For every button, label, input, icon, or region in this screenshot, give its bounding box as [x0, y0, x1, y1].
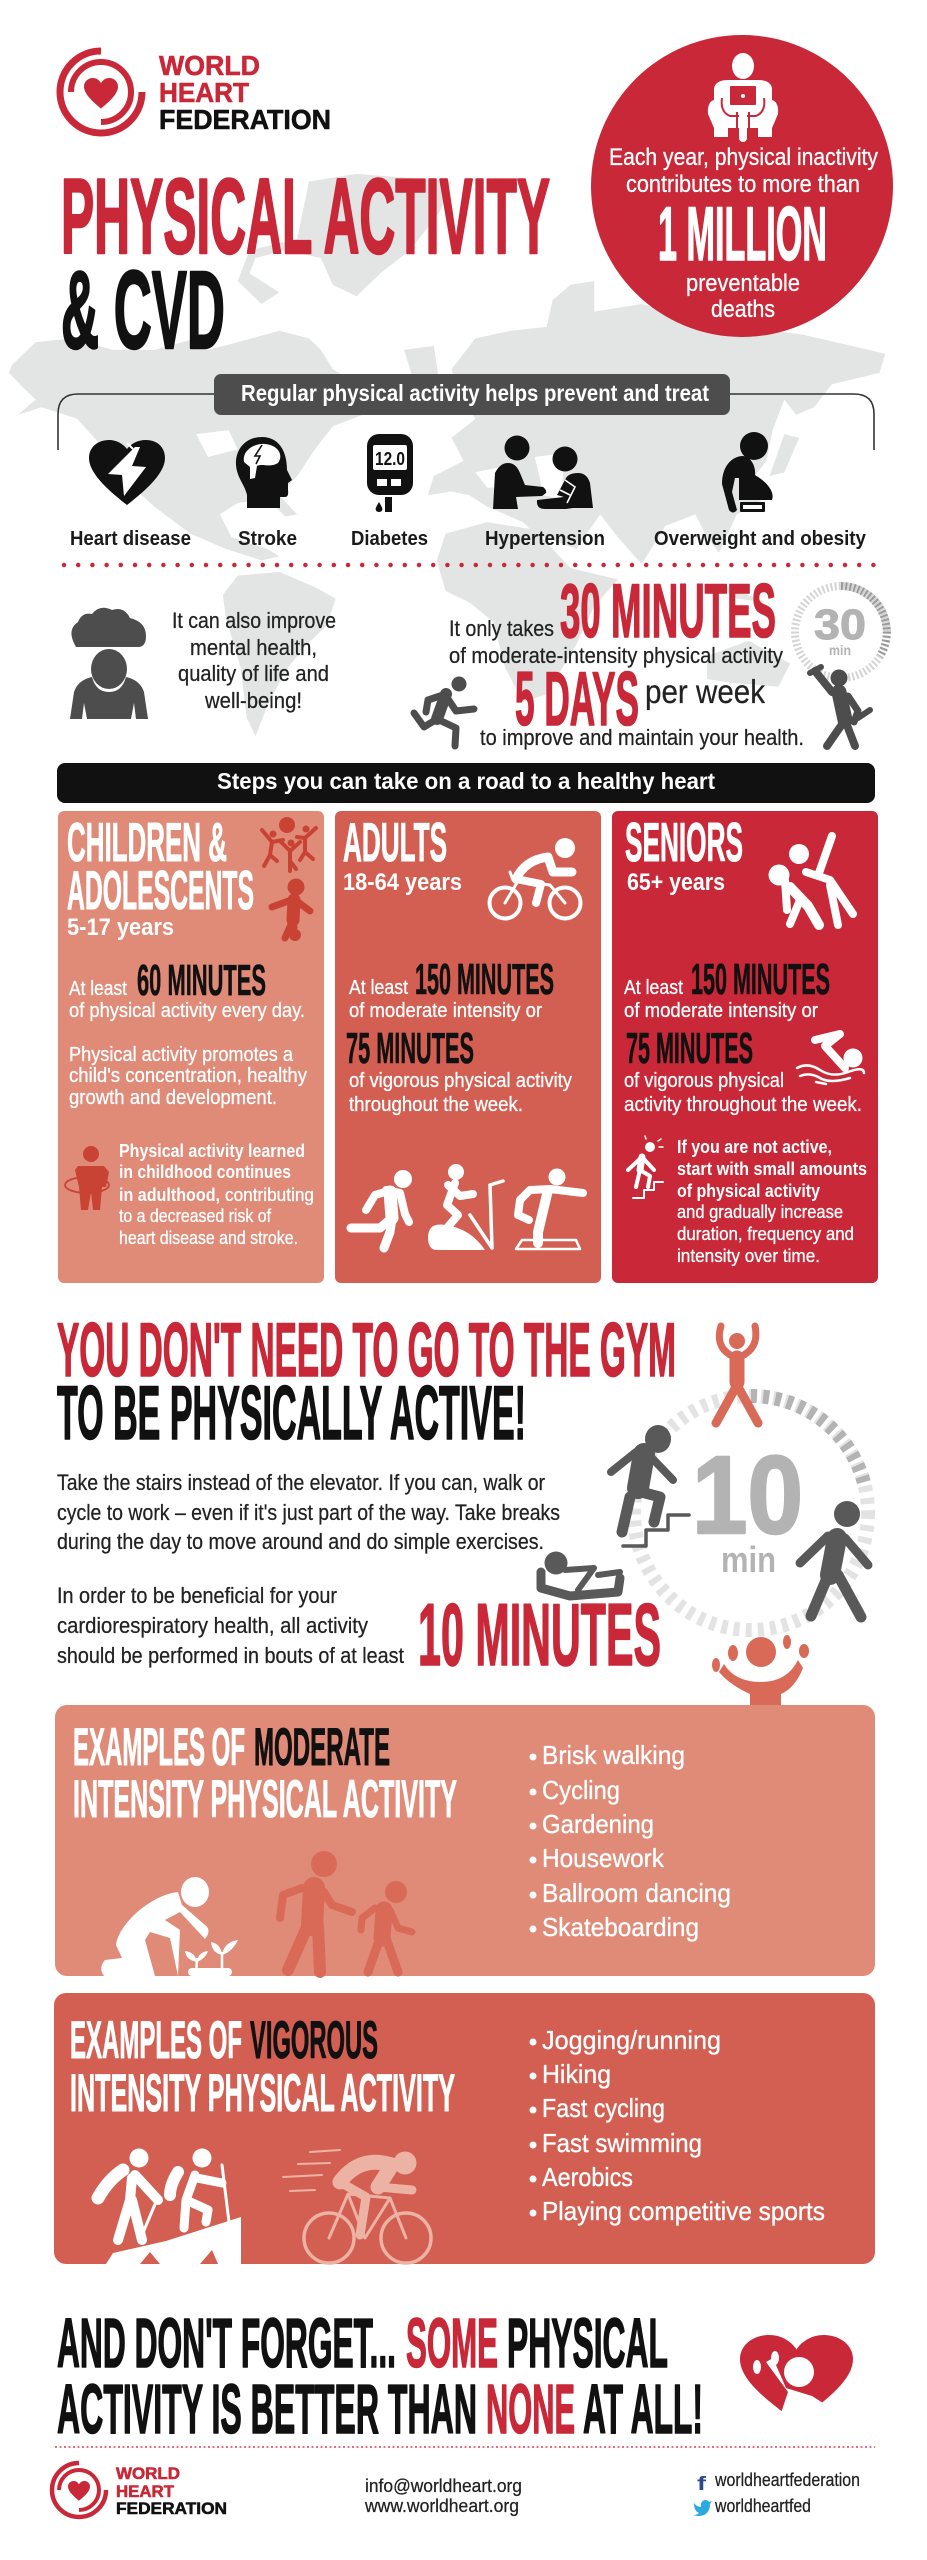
- panel: adults: of moderate intensity or: [349, 1000, 542, 1022]
- callout: 1 million deaths circle: deaths: [711, 296, 775, 323]
- text: 30 minutes 5 days: per week: [645, 673, 765, 710]
- panel: seniors: 65+ years: [627, 869, 725, 896]
- panel: vigorous intensity examples: [54, 1993, 875, 2264]
- text: mental health benefit: quality of life and: [178, 661, 329, 686]
- text: everyday activity tips: cycle to work – even if it's just part of the way. Take breaks: [57, 1500, 560, 1525]
- text: everyday activity tips: In order to be beneficial for your: [57, 1583, 337, 1608]
- panel: adults: 75 MINUTES: [346, 1024, 474, 1073]
- panel: children and adolescents: in adulthood,: [119, 1185, 220, 1205]
- icon: 10 min clock: [634, 1396, 868, 1630]
- closing message: PHYSICAL: [507, 2304, 668, 2382]
- icon: 30 min clock: [795, 586, 887, 678]
- panel: moderate intensity examples: [55, 1705, 875, 1976]
- icon: person sitting with laptop: [708, 53, 778, 138]
- icon: glucose meter: 12.0: [375, 449, 405, 469]
- panel: adults: ADULTS: [343, 811, 447, 873]
- icon: stroke brain head: [236, 437, 292, 508]
- icon: walking person: [800, 1501, 868, 1617]
- icon: child with hula hoop: [65, 1146, 109, 1210]
- heading: you don't need to go to the gym: [57, 1308, 676, 1456]
- panel: children and adolescents: CHILDREN &: [67, 811, 227, 873]
- footer logo: WORLD: [116, 2464, 180, 2483]
- callout: 1 million deaths circle: [591, 35, 893, 337]
- panel: seniors: activity throughout the week.: [624, 1094, 862, 1116]
- text: everyday activity tips: should be performed in bouts of at least: [57, 1643, 404, 1668]
- logo: World Heart Federation: [60, 50, 331, 135]
- banner: regular physical activity: Regular physical activity helps prevent and treat: [241, 380, 709, 406]
- panel: vigorous intensity examples: EXAMPLES OF: [70, 2011, 242, 2070]
- text: mental health benefit: It can also improve: [172, 608, 336, 633]
- closing message: SOME: [406, 2304, 498, 2382]
- panel: children and adolescents: child's concentration, healthy: [69, 1065, 307, 1087]
- icon: child with football: [272, 878, 310, 941]
- icon: 10 min clock: 10: [692, 1434, 803, 1557]
- callout: 1 million deaths circle: preventable: [686, 270, 800, 297]
- icon: weightlifter: [810, 667, 870, 746]
- closing message: AND DON'T FORGET...: [57, 2304, 396, 2382]
- text: 30 minutes 5 days: of moderate-intensity physical activity: [449, 643, 783, 668]
- logo: World Heart Federation: FEDERATION: [159, 104, 331, 135]
- text: 10 MINUTES: [418, 1585, 661, 1684]
- text: everyday activity tips: during the day to move around and do simple exercises.: [57, 1529, 544, 1554]
- text: 30 minutes 5 days: to improve and maintain your health.: [480, 725, 804, 750]
- logo: World Heart Federation: WORLD: [159, 50, 260, 81]
- text: 30 minutes 5 days: 5 DAYS: [515, 657, 639, 742]
- icon: broken heart: [89, 440, 165, 505]
- text: everyday activity tips: cardiorespiratory health, all activity: [57, 1613, 368, 1638]
- panel: children and adolescents: heart disease and stroke.: [119, 1228, 298, 1248]
- panel: vigorous intensity examples: VIGOROUS: [250, 2011, 378, 2070]
- list: moderate activities: Ballroom dancing: [542, 1878, 731, 1908]
- callout: 1 million deaths circle: Each year, physical inactivity: [609, 144, 878, 171]
- text: 30 minutes 5 days: [449, 569, 804, 750]
- icon: person climbing stairs: [628, 1136, 663, 1198]
- panel: adults: of vigorous physical activity: [349, 1070, 572, 1092]
- panel: children and adolescents: contributing: [225, 1185, 314, 1205]
- bracket frame around conditions: [58, 394, 874, 450]
- panel: seniors: start with small amounts: [677, 1159, 867, 1179]
- list: vigorous activities: Hiking: [542, 2059, 611, 2089]
- icon: elliptical trainer: [428, 1164, 503, 1250]
- panel: adults: 150 MINUTES: [415, 955, 554, 1004]
- icon: dancing couple: [768, 836, 853, 925]
- panel: children and adolescents: 60 MINUTES: [137, 956, 266, 1005]
- panel: moderate intensity examples: INTENSITY PHYSICAL ACTIVITY: [73, 1770, 457, 1829]
- text: mental health benefit: [172, 608, 336, 713]
- icon: hikers on mountain: [98, 2148, 241, 2264]
- labels: conditions: Diabetes: [351, 528, 428, 550]
- panel: children and adolescents: Physical activity learned: [119, 1141, 305, 1161]
- panel: seniors: If you are not active,: [677, 1137, 832, 1157]
- icon: runner white: [351, 1170, 412, 1248]
- icon: glucose meter: [367, 434, 413, 512]
- closing message: NONE: [486, 2370, 575, 2448]
- panel: adults: [335, 811, 601, 1283]
- list: vigorous activities: Playing competitive sports: [542, 2196, 825, 2226]
- panel: children and adolescents: of physical activity every day.: [69, 1000, 305, 1022]
- icon: runner: [414, 676, 474, 746]
- panel: seniors: duration, frequency and: [677, 1224, 854, 1244]
- panel: seniors: of moderate intensity or: [624, 1000, 818, 1022]
- icon: person stretching on mat: [516, 1168, 583, 1249]
- list: moderate activities: Skateboarding: [542, 1912, 699, 1942]
- panel: children and adolescents: growth and development.: [69, 1087, 277, 1109]
- text: mental health benefit: mental health,: [190, 635, 317, 660]
- icon: racing cyclist: [283, 2150, 431, 2263]
- icon: hypertension check: [493, 436, 593, 509]
- icon: 10 min clock: min: [721, 1539, 776, 1580]
- social: twitter: worldheartfed: [714, 2496, 811, 2516]
- panel: children and adolescents: At least: [69, 978, 127, 1000]
- icon: 30 min clock: 30: [814, 601, 866, 649]
- icon: cheering person: [712, 1635, 809, 1705]
- labels: conditions: Stroke: [238, 528, 297, 550]
- text: everyday activity tips: Take the stairs instead of the elevator. If you can, walk or: [57, 1470, 545, 1495]
- contact details: [364, 2476, 522, 2516]
- world map background: [9, 174, 885, 736]
- labels: conditions: [70, 528, 867, 550]
- panel: seniors: of vigorous physical: [624, 1070, 784, 1092]
- panel: moderate intensity examples: MODERATE: [254, 1718, 390, 1777]
- list: vigorous activities: Jogging/running: [542, 2025, 721, 2055]
- banner: steps: Steps you can take on a road to a healthy heart: [217, 768, 715, 794]
- icon: jumping person: [716, 1326, 758, 1423]
- panel: children and adolescents: 5-17 years: [67, 914, 174, 941]
- social: facebook: [697, 2470, 860, 2495]
- footer logo: FEDERATION: [116, 2499, 227, 2518]
- panel: children and adolescents: to a decreased risk of: [119, 1206, 272, 1226]
- list: moderate activities: Housework: [542, 1843, 665, 1873]
- icon: 30 min clock: min: [829, 642, 851, 658]
- list: vigorous activities: [530, 2025, 825, 2226]
- contact details: www.worldheart.org: [364, 2496, 519, 2516]
- icon: cyclist: [490, 838, 580, 918]
- list: moderate activities: Brisk walking: [542, 1740, 685, 1770]
- list: vigorous activities: Fast swimming: [542, 2128, 702, 2158]
- panel: seniors: 75 MINUTES: [626, 1024, 753, 1073]
- icon: overweight person with tape: [722, 432, 773, 512]
- panel: adults: 18-64 years: [343, 869, 462, 896]
- list: moderate activities: Gardening: [542, 1809, 654, 1839]
- panel: adults: At least: [349, 977, 408, 999]
- list: moderate activities: Cycling: [542, 1775, 620, 1805]
- panel: children and adolescents: ADOLESCENTS: [67, 859, 254, 921]
- text: AT ALL!: [583, 2370, 703, 2448]
- panel: vigorous intensity examples: INTENSITY PHYSICAL ACTIVITY: [70, 2064, 455, 2123]
- labels: conditions: Heart disease: [70, 528, 191, 550]
- closing message: [57, 2304, 703, 2448]
- contact details: info@worldheart.org: [365, 2476, 522, 2496]
- list: vigorous activities: Fast cycling: [542, 2093, 665, 2123]
- text: 30 minutes 5 days: It only takes: [449, 616, 554, 641]
- footer logo: [52, 2463, 227, 2518]
- panel: seniors: SENIORS: [625, 811, 743, 873]
- title: [61, 156, 550, 372]
- icon: children playing: [262, 817, 316, 871]
- list: moderate activities: [530, 1740, 731, 1942]
- panel: seniors: of physical activity: [677, 1181, 820, 1201]
- banner: regular physical activity: [214, 374, 730, 415]
- text: mental health benefit: well-being!: [204, 688, 302, 713]
- panel: seniors: [612, 811, 878, 1283]
- icon: gardener: [101, 1877, 238, 1976]
- panel: children and adolescents: in childhood continues: [119, 1162, 291, 1182]
- title: & CVD: [61, 249, 225, 372]
- social: facebook: worldheartfederation: [714, 2470, 860, 2490]
- panel: seniors: At least: [624, 977, 683, 999]
- panel: seniors: and gradually increase: [677, 1202, 843, 1222]
- icon: swimmer: [797, 1034, 864, 1084]
- panel: children and adolescents: Physical activity promotes a: [69, 1044, 294, 1066]
- social: facebook: f: [697, 2474, 707, 2495]
- labels: conditions: Overweight and obesity: [654, 528, 867, 550]
- panel: adults: throughout the week.: [349, 1094, 523, 1116]
- icon: person doing sit-ups: [541, 1552, 620, 1596]
- icon: person on stairs: [611, 1425, 689, 1546]
- footer logo: HEART: [116, 2482, 175, 2501]
- logo: World Heart Federation: HEART: [159, 77, 249, 108]
- panel: children and adolescents: [58, 811, 324, 1283]
- banner: steps: [57, 763, 875, 803]
- panel: moderate intensity examples: EXAMPLES OF: [73, 1718, 245, 1777]
- icon: heart with exercising person: [740, 2335, 853, 2424]
- panel: seniors: intensity over time.: [677, 1246, 820, 1266]
- list: vigorous activities: Aerobics: [542, 2162, 633, 2192]
- labels: conditions: Hypertension: [485, 528, 605, 550]
- icon: adult and child walking: [280, 1851, 412, 1972]
- callout: 1 million deaths circle: contributes to more than: [626, 171, 860, 198]
- icon: person under a cloud: [70, 608, 148, 719]
- text: everyday activity tips: [57, 1470, 560, 1668]
